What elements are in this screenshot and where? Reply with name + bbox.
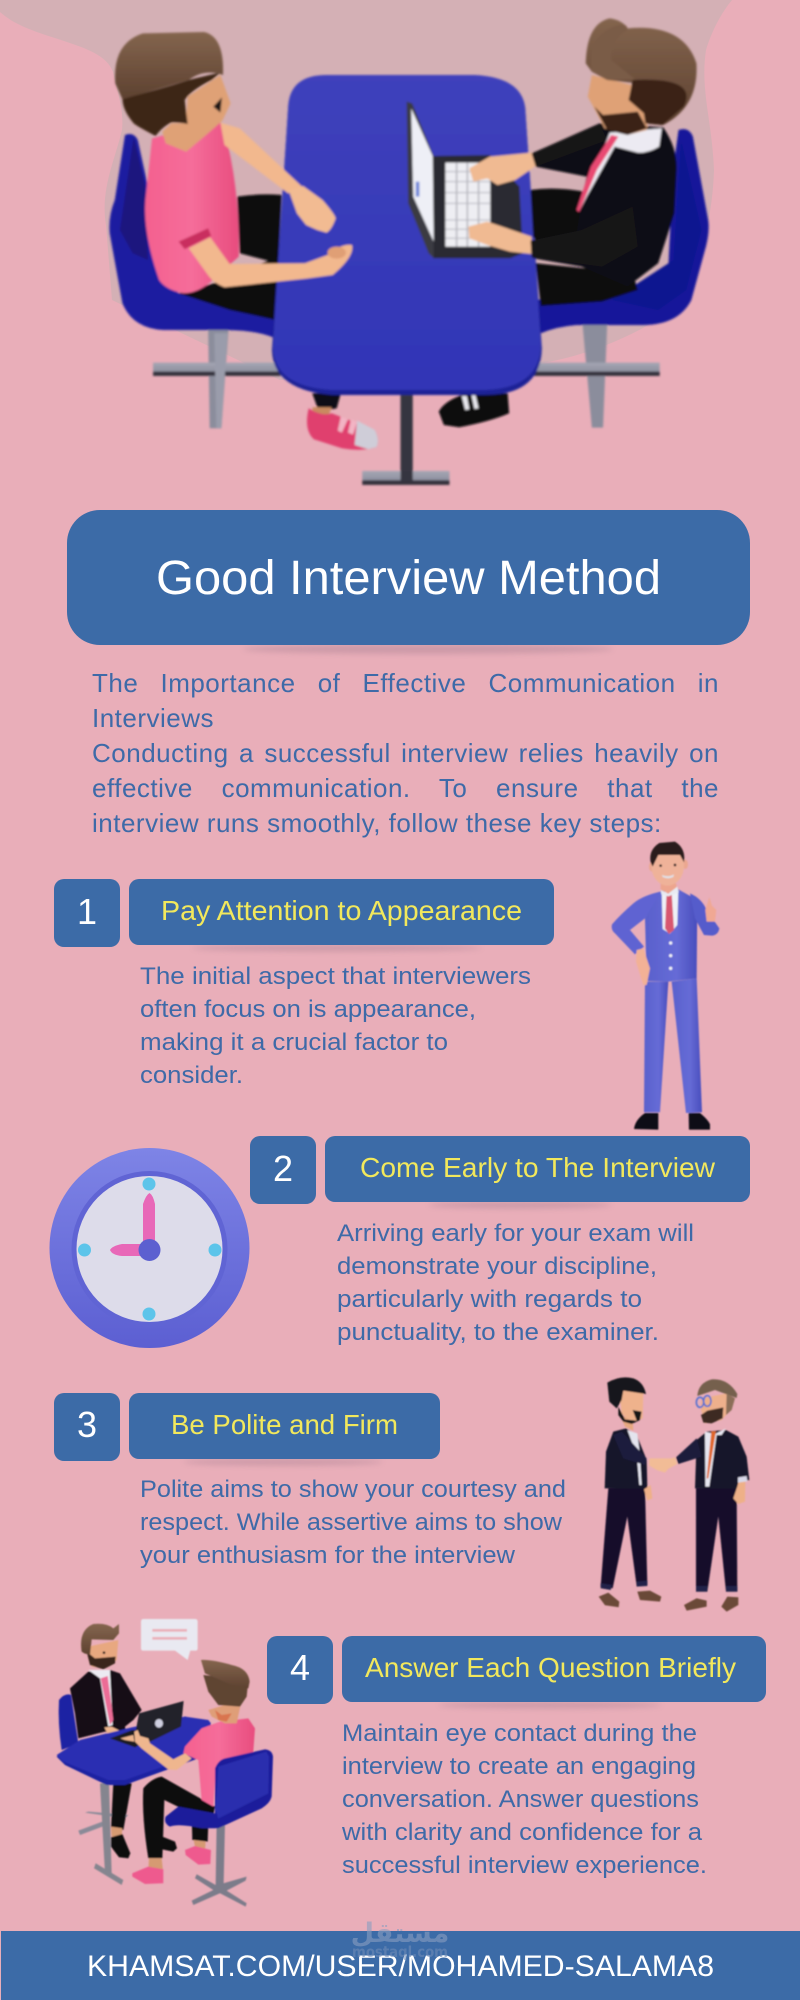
body text 4: successful interview experience. bbox=[342, 1852, 707, 1879]
body text 4: interview to create an engaging bbox=[342, 1753, 696, 1780]
right man bbox=[662, 1379, 749, 1612]
body text 2: punctuality, to the examiner. bbox=[337, 1319, 659, 1346]
far table stand bbox=[78, 1783, 128, 1885]
table leg bbox=[362, 393, 449, 485]
body text 4: with clarity and confidence for a bbox=[341, 1819, 702, 1846]
watermark: mostaql.com bbox=[352, 1943, 448, 1961]
right person body bbox=[531, 123, 677, 306]
heading bar 3: Be Polite and Firm bbox=[171, 1409, 398, 1440]
title: Good Interview Method bbox=[156, 552, 661, 605]
step 1 bbox=[54, 879, 554, 1089]
left person legs and shoe bbox=[179, 194, 378, 450]
left person head bbox=[115, 32, 231, 152]
heading bar 3 bbox=[129, 1393, 440, 1459]
body text 4: Maintain eye contact during the bbox=[342, 1720, 697, 1747]
right person head bbox=[586, 18, 697, 135]
step 3 bbox=[54, 1393, 566, 1569]
body text 1: The initial aspect that interviewers bbox=[140, 963, 531, 990]
intro paragraph: Conducting a successful interview relies heavily on bbox=[92, 738, 719, 768]
number badge 3: 3 bbox=[77, 1404, 97, 1445]
number badge 1: 1 bbox=[77, 891, 97, 932]
icon: clock bbox=[50, 1148, 250, 1348]
body text 4 bbox=[341, 1720, 707, 1879]
footer link text: KHAMSAT.COM/USER/MOHAMED-SALAMA8 bbox=[87, 1950, 714, 1983]
number badge 1 bbox=[54, 879, 120, 947]
illustration: conversation at a table with speech bubble bbox=[57, 1619, 273, 1907]
number badge 2: 2 bbox=[273, 1148, 293, 1189]
illustration: interview at a table bbox=[109, 18, 709, 485]
heading bar 4 bbox=[342, 1636, 766, 1702]
panel: title banner bbox=[67, 510, 750, 654]
body text 2 bbox=[337, 1220, 694, 1346]
background blob bbox=[0, 0, 732, 380]
number badge 2 bbox=[250, 1136, 316, 1204]
step 4 bbox=[267, 1636, 766, 1879]
left man bbox=[599, 1377, 672, 1607]
body text 3 bbox=[140, 1476, 566, 1569]
body text 1: often focus on is appearance, bbox=[140, 996, 476, 1023]
illustration: man with thumb up bbox=[612, 842, 719, 1130]
body text 4: conversation. Answer questions bbox=[342, 1786, 699, 1813]
heading bar 2 bbox=[325, 1136, 750, 1202]
seated person in pink bbox=[132, 1660, 255, 1884]
far chair bbox=[59, 1694, 78, 1750]
body text 3: respect. While assertive aims to show bbox=[140, 1509, 562, 1536]
body text 1: making it a crucial factor to bbox=[140, 1029, 448, 1056]
body text 1: consider. bbox=[140, 1062, 243, 1089]
number badge 4: 4 bbox=[290, 1647, 310, 1688]
heading bar 1: Pay Attention to Appearance bbox=[161, 895, 522, 926]
laptop bbox=[110, 1701, 184, 1747]
legs of man in suit bbox=[111, 1783, 177, 1858]
man in suit bbox=[70, 1624, 142, 1743]
intro paragraph: Interviews bbox=[92, 703, 214, 733]
right chair bbox=[533, 129, 709, 428]
body text 2: demonstrate your discipline, bbox=[337, 1253, 657, 1280]
left person torso bbox=[145, 120, 352, 293]
number badge 4 bbox=[267, 1636, 333, 1704]
intro paragraph: effective communication. To ensure that the bbox=[92, 773, 719, 803]
body text 3: Polite aims to show your courtesy and bbox=[140, 1476, 566, 1503]
illustration: two men shaking hands bbox=[599, 1377, 749, 1612]
speech bubble bbox=[141, 1619, 198, 1660]
body text 1 bbox=[140, 963, 531, 1089]
front chair bbox=[165, 1749, 273, 1907]
watermark: مستقل bbox=[351, 1918, 449, 1949]
left chair bbox=[109, 134, 281, 428]
intro paragraph bbox=[92, 668, 719, 838]
body text 2: Arriving early for your exam will bbox=[337, 1220, 694, 1247]
body text 3: your enthusiasm for the interview bbox=[140, 1542, 515, 1569]
panel: footer bar bbox=[1, 1931, 800, 2000]
right person shoe bbox=[439, 393, 509, 427]
table bbox=[57, 1717, 211, 1785]
intro paragraph: interview runs smoothly, follow these key steps: bbox=[92, 808, 662, 838]
body text 2: particularly with regards to bbox=[337, 1286, 642, 1313]
laptop bbox=[407, 102, 523, 258]
intro paragraph: The Importance of Effective Communication in bbox=[92, 668, 719, 698]
right person arms and hands bbox=[468, 124, 638, 267]
number badge 3 bbox=[54, 1393, 120, 1461]
heading bar 2: Come Early to The Interview bbox=[360, 1152, 716, 1183]
heading bar 1 bbox=[129, 879, 554, 945]
heading bar 4: Answer Each Question Briefly bbox=[365, 1652, 736, 1683]
step 2 bbox=[250, 1136, 750, 1346]
table top bbox=[272, 75, 542, 395]
